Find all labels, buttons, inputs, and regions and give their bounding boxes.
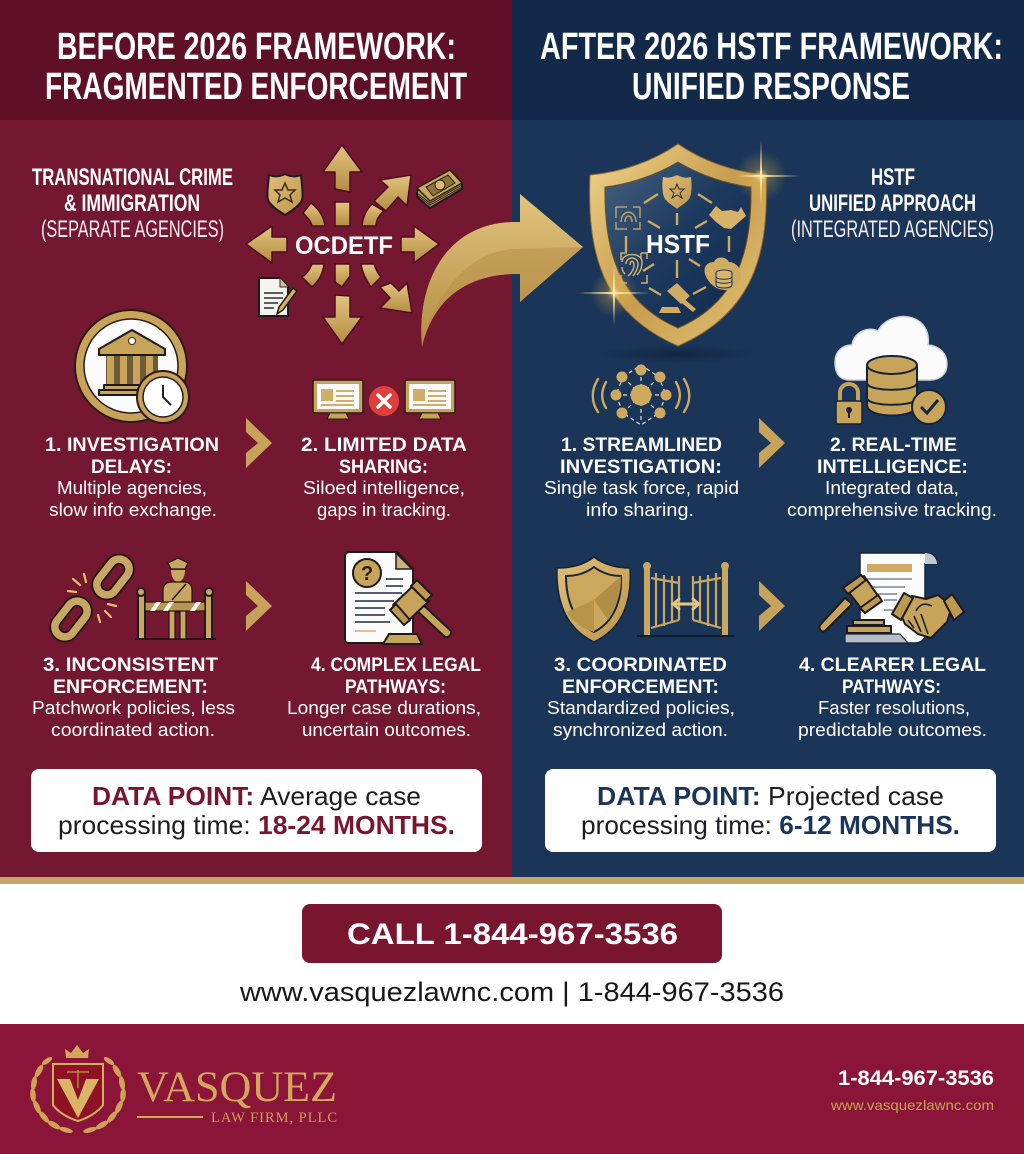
- text: coordinated enforcement: Standardized policies,: [547, 697, 735, 718]
- text: clearer legal pathways: predictable outcomes.: [798, 719, 987, 740]
- text block: separate agencies: & IMMIGRATION: [64, 190, 200, 217]
- text: clearer legal pathways: [798, 655, 987, 740]
- text: clearer legal pathways: 4. CLEARER LEGAL: [799, 655, 986, 676]
- callout: before data point: DATA POINT: Average case: [92, 781, 421, 811]
- icon: handshake: [892, 593, 964, 638]
- arrow: before to after: [421, 194, 583, 347]
- icon: broken chain: [51, 555, 133, 641]
- footer: [0, 1024, 1024, 1154]
- text: limited data sharing: 2. LIMITED DATA: [301, 435, 467, 456]
- text: complex legal pathways: 4. COMPLEX LEGAL: [311, 655, 481, 676]
- text: complex legal pathways: uncertain outcomes.: [302, 719, 471, 740]
- icon: network hub: [593, 364, 689, 425]
- icon: shield scanner: [616, 207, 640, 229]
- icon: shield cloud database: [705, 258, 741, 290]
- icon: guard at barrier: [135, 558, 216, 639]
- icon: padlock: [836, 384, 862, 424]
- label: OCDETF: OCDETF: [295, 232, 393, 260]
- footer website: www.vasquezlawnc.com: [830, 1098, 994, 1113]
- icon: HSTF shield: [578, 140, 800, 363]
- text: investigation delays: 1. INVESTIGATION: [45, 435, 219, 456]
- text: limited data sharing: SHARING:: [339, 457, 428, 478]
- icon: gold shield: [557, 557, 630, 642]
- button: call: CALL 1-844-967-3536: [347, 918, 678, 951]
- icon: gavel: [383, 580, 451, 644]
- text: streamlined investigation: info sharing.: [586, 499, 694, 520]
- text block: unified approach: HSTF: [871, 164, 915, 191]
- heading: before framework: BEFORE 2026 FRAMEWORK:: [57, 26, 456, 68]
- divider band: [0, 877, 1024, 884]
- text block: separate agencies: [32, 164, 233, 243]
- heading: before framework: [45, 26, 467, 108]
- text: real-time intelligence: comprehensive tracking.: [787, 499, 997, 520]
- text: clearer legal pathways: PATHWAYS:: [842, 677, 941, 698]
- text: coordinated enforcement: ENFORCEMENT:: [562, 677, 719, 698]
- text: coordinated enforcement: 3. COORDINATED: [554, 655, 727, 676]
- icon: question document and gavel: [345, 552, 451, 644]
- icon: cash stack: [417, 170, 462, 208]
- heading: after framework: UNIFIED RESPONSE: [632, 66, 910, 108]
- text: investigation delays: [45, 435, 219, 520]
- panel: call to action: [0, 884, 1024, 1024]
- text: inconsistent enforcement: [32, 655, 235, 740]
- text: real-time intelligence: [787, 435, 997, 520]
- footer phone: 1-844-967-3536: [838, 1067, 994, 1090]
- text: coordinated enforcement: [547, 655, 735, 740]
- icon: gate with arrow: [637, 562, 734, 636]
- text: inconsistent enforcement: coordinated action.: [51, 719, 215, 740]
- icon: document with pen: [259, 278, 297, 316]
- text: inconsistent enforcement: Patchwork policies, less: [32, 697, 235, 718]
- icon: shield handshake: [709, 206, 746, 229]
- text: investigation delays: Multiple agencies,: [57, 477, 207, 498]
- callout: after data point: processing time: 6-12 MONTHS.: [581, 810, 960, 840]
- label: HSTF: HSTF: [646, 229, 710, 259]
- text: limited data sharing: gaps in tracking.: [317, 499, 451, 520]
- text: streamlined investigation: INVESTIGATION:: [560, 457, 722, 478]
- icon: crest shield: [53, 1064, 103, 1121]
- sparkle: top right: [735, 140, 800, 205]
- text: complex legal pathways: PATHWAYS:: [345, 677, 446, 698]
- heading: before framework: FRAGMENTED ENFORCEMENT: [45, 66, 467, 108]
- icon: check badge: [912, 390, 946, 424]
- text: investigation delays: slow info exchange.: [49, 499, 217, 520]
- icon: shield badge: [662, 175, 692, 209]
- icon: cloud database lock: [835, 317, 947, 424]
- logo: wordmark: LAW FIRM, PLLC: [211, 1110, 337, 1126]
- text: limited data sharing: Siloed intelligence,: [303, 477, 465, 498]
- icon: courthouse and clock: [75, 310, 189, 423]
- text: limited data sharing: [301, 435, 467, 520]
- panel: before framework: [0, 0, 512, 878]
- text: real-time intelligence: Integrated data,: [825, 477, 959, 498]
- text block: separate agencies: TRANSNATIONAL CRIME: [32, 164, 233, 191]
- text: complex legal pathways: Longer case durations,: [287, 697, 481, 718]
- text: complex legal pathways: [287, 655, 481, 740]
- text: investigation delays: DELAYS:: [91, 457, 172, 478]
- heading: after framework: [540, 26, 1003, 108]
- icon: OCDETF scattered arrows: [246, 145, 462, 344]
- icon: laurel wreath: [30, 1056, 126, 1134]
- icon: shield gavel: [659, 283, 696, 313]
- icon: crown: [65, 1045, 89, 1058]
- text block: separate agencies: (SEPARATE AGENCIES): [41, 216, 224, 243]
- icon: red cross: [369, 386, 399, 416]
- icon: right monitor: [405, 380, 455, 419]
- text: inconsistent enforcement: 3. INCONSISTENT: [43, 655, 218, 676]
- text: clearer legal pathways: Faster resolutions,: [818, 697, 970, 718]
- sparkle: bottom left: [578, 262, 650, 326]
- icon: scroll, gavel and handshake: [819, 553, 964, 643]
- callout: after data point: [545, 769, 996, 852]
- text block: unified approach: [791, 164, 994, 243]
- icon: left monitor: [313, 380, 363, 419]
- text: coordinated enforcement: synchronized action.: [553, 719, 728, 740]
- callout: after data point: DATA POINT: Projected case: [597, 781, 944, 811]
- button: call: [302, 904, 722, 963]
- logo: wordmark: VASQUEZ: [137, 1064, 337, 1111]
- panel: after framework: [512, 0, 1024, 878]
- icon: clock: [137, 371, 189, 423]
- icon: police badge: [267, 174, 303, 215]
- icon: shield fingerprint: [621, 253, 647, 283]
- text: real-time intelligence: INTELLIGENCE:: [817, 457, 968, 478]
- text: real-time intelligence: 2. REAL-TIME: [830, 435, 957, 456]
- icon: question document and gavel: ?: [361, 563, 373, 585]
- text: streamlined investigation: 1. STREAMLINED: [561, 435, 722, 456]
- text: streamlined investigation: [544, 435, 739, 520]
- callout: before data point: [31, 769, 482, 852]
- logo: crest: [30, 1045, 126, 1134]
- chevrons: step arrows: [246, 418, 785, 631]
- text: inconsistent enforcement: ENFORCEMENT:: [53, 677, 208, 698]
- contact line: www.vasquezlawnc.com | 1-844-967-3536: [239, 977, 784, 1007]
- callout: before data point: processing time: 18-24 MONTHS.: [58, 810, 455, 840]
- icon: disconnected monitors: [313, 380, 455, 419]
- text: streamlined investigation: Single task force, rapid: [544, 477, 739, 498]
